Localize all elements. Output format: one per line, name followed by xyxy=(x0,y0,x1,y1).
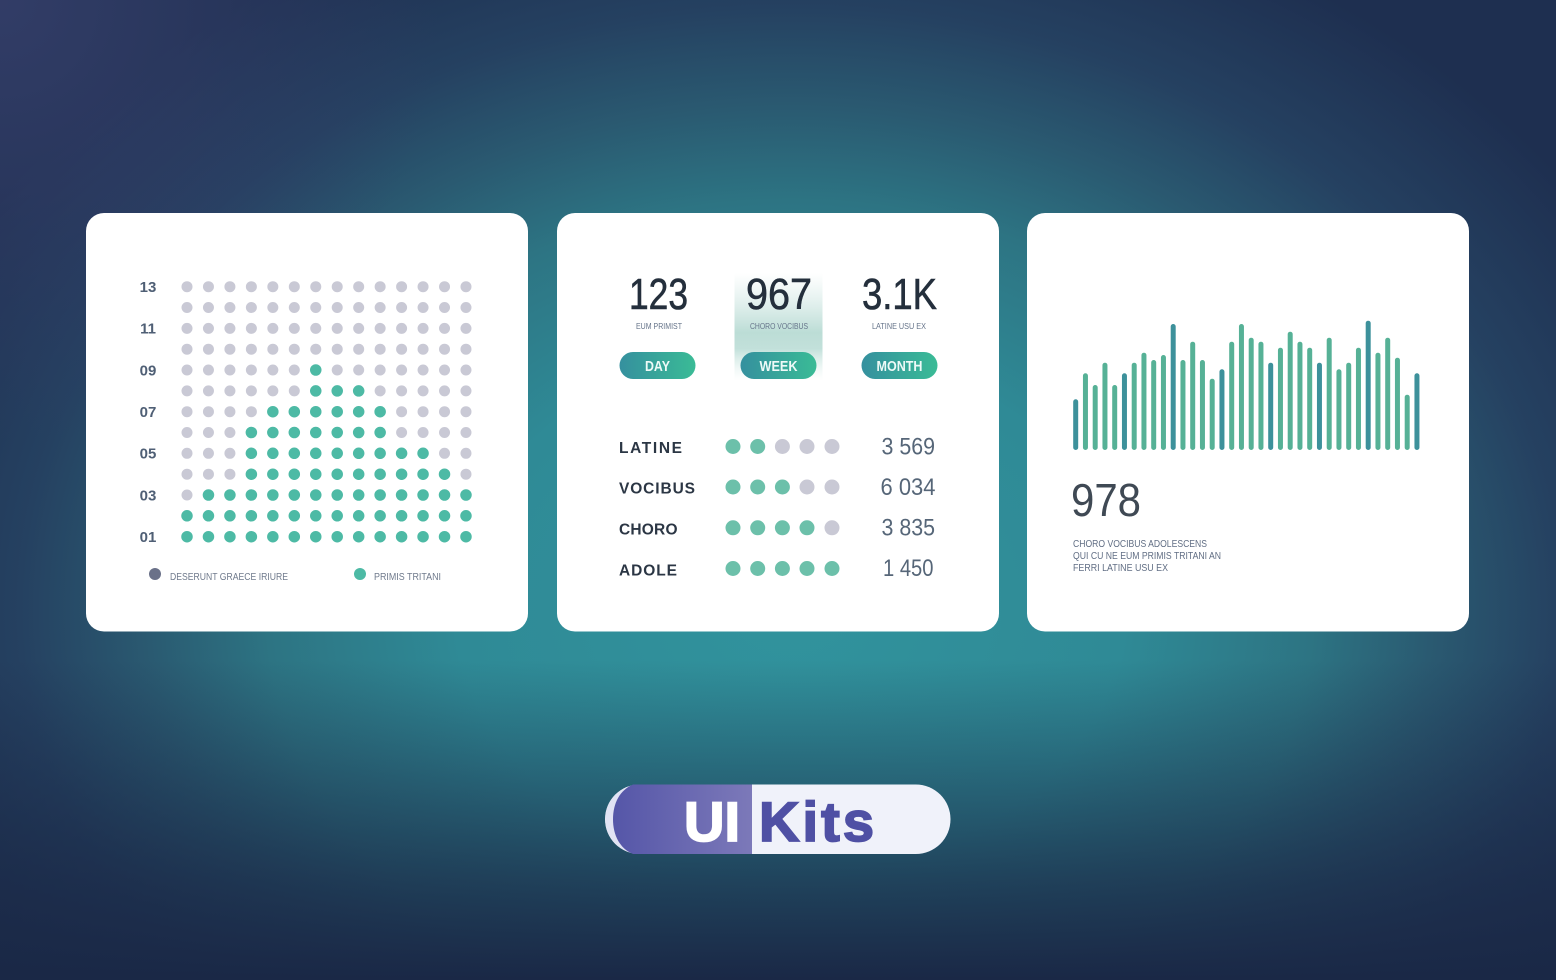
stat numbers: 967 xyxy=(746,270,812,319)
rating dots xyxy=(726,439,840,576)
badge base xyxy=(605,784,950,854)
stat numbers: 123 xyxy=(629,270,688,319)
description: FERRI LATINE USU EX xyxy=(1073,563,1168,574)
axis labels: 07 xyxy=(140,404,156,421)
row values: 3 835 xyxy=(882,514,935,542)
legend: DESERUNT GRAECE IRIURE xyxy=(170,572,288,583)
big number: 978 xyxy=(1071,474,1141,526)
badge word UI: UI xyxy=(684,790,740,853)
badge dark section xyxy=(613,784,752,854)
panel: bar chart xyxy=(1027,213,1469,632)
axis labels: 01 xyxy=(140,529,156,546)
gray dot grid xyxy=(187,287,466,495)
green dots xyxy=(187,370,466,537)
row values: 1 450 xyxy=(883,555,934,582)
card xyxy=(86,213,528,632)
panel: dot matrix xyxy=(86,213,528,632)
stat captions: LATINE USU EX xyxy=(872,322,927,331)
background corner tint xyxy=(0,0,440,440)
badge word Kits: Kits xyxy=(759,790,874,853)
week highlight xyxy=(734,273,822,381)
description xyxy=(1073,539,1221,574)
axis labels: 09 xyxy=(140,362,156,380)
background bottom shade xyxy=(0,660,1556,980)
axis labels: 05 xyxy=(140,446,156,462)
card xyxy=(1027,213,1469,632)
stat numbers xyxy=(629,270,937,319)
badge: UI Kits xyxy=(605,784,950,854)
axis labels: 11 xyxy=(140,320,156,338)
row values: 6 034 xyxy=(880,474,936,501)
description: QUI CU NE EUM PRIMIS TRITANI AN xyxy=(1073,551,1221,562)
row labels xyxy=(619,440,695,580)
stat captions: EUM PRIMIST xyxy=(636,322,682,331)
row labels: VOCIBUS xyxy=(619,480,695,498)
panel: summary stats xyxy=(557,213,999,632)
stat numbers: 3.1K xyxy=(862,270,937,319)
row values xyxy=(880,434,936,582)
bars: green xyxy=(1085,326,1407,448)
legend xyxy=(149,568,441,583)
stat captions: CHORO VOCIBUS xyxy=(750,322,808,331)
period buttons: WEEK xyxy=(760,359,798,375)
axis labels: 13 xyxy=(140,279,156,296)
row labels: ADOLE xyxy=(619,562,677,580)
axis labels xyxy=(140,279,156,546)
card xyxy=(557,213,999,632)
legend: PRIMIS TRITANI xyxy=(374,572,441,583)
badge crescent xyxy=(605,784,752,854)
row values: 3 569 xyxy=(882,434,935,460)
period buttons: MONTH xyxy=(876,359,922,375)
bars: teal accents xyxy=(1076,323,1417,448)
row labels: LATINE xyxy=(619,440,682,457)
period buttons xyxy=(620,352,938,379)
row labels: CHORO xyxy=(619,522,678,538)
stat captions xyxy=(636,322,927,331)
description: CHORO VOCIBUS ADOLESCENS xyxy=(1073,539,1207,550)
period buttons: DAY xyxy=(645,359,670,375)
axis labels: 03 xyxy=(140,488,156,504)
